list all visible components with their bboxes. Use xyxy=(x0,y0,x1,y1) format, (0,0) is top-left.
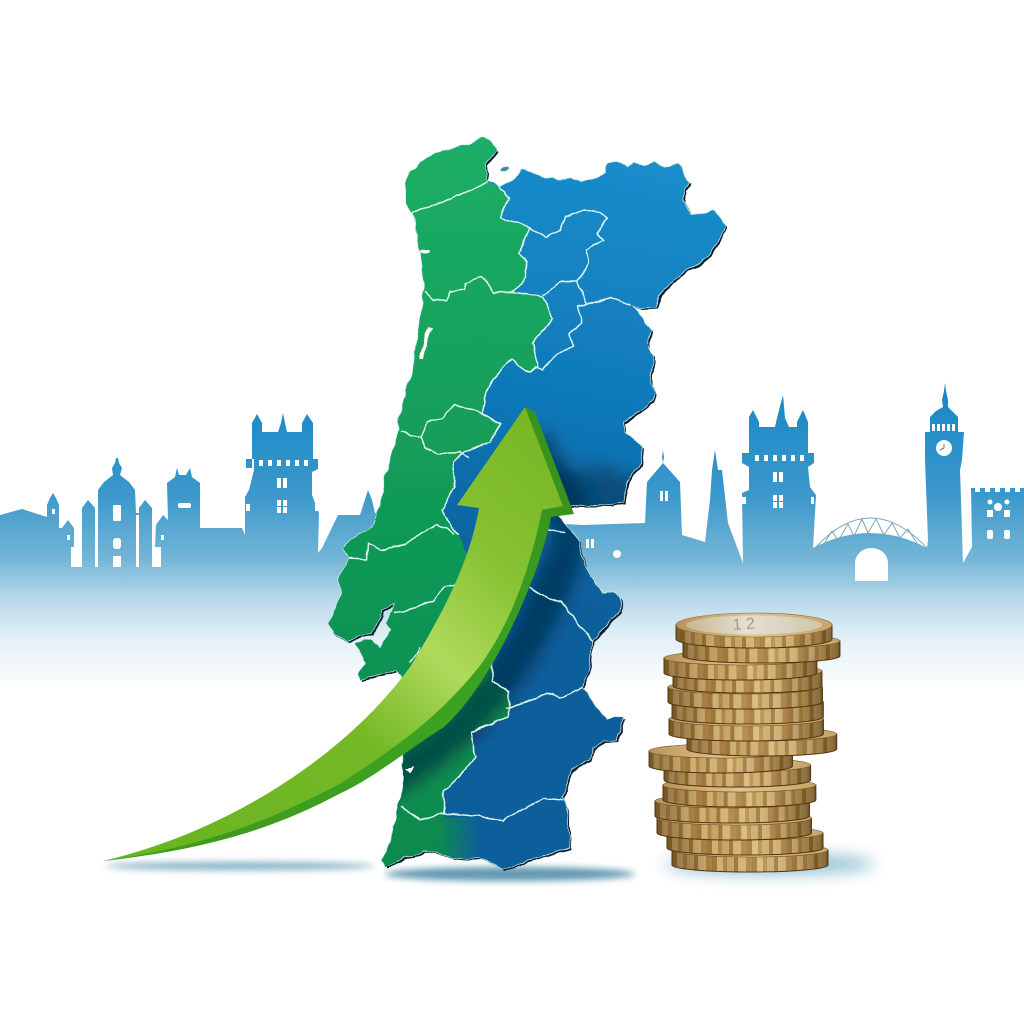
arrow side face xyxy=(103,407,573,861)
growth arrow xyxy=(103,407,574,861)
coin numerals: 1 2 xyxy=(732,615,756,634)
bridge lattice xyxy=(815,518,927,548)
dark corner shade xyxy=(535,467,645,523)
map regions xyxy=(328,137,726,869)
islet xyxy=(500,164,510,172)
coin stack xyxy=(649,613,840,872)
region borders xyxy=(346,182,630,820)
skyline band xyxy=(0,383,1024,690)
ground shadows xyxy=(105,854,875,881)
arrow shadow on map xyxy=(345,440,575,805)
skyline windows and gaps xyxy=(52,424,1010,581)
map drop edge xyxy=(331,139,727,872)
map of Portugal xyxy=(328,136,727,871)
clock hands xyxy=(940,444,944,450)
top coin xyxy=(676,613,832,648)
map glow edge xyxy=(329,137,725,870)
arrow top face xyxy=(103,407,563,861)
arrow head side xyxy=(525,407,574,517)
coastal lagoons xyxy=(404,250,432,774)
